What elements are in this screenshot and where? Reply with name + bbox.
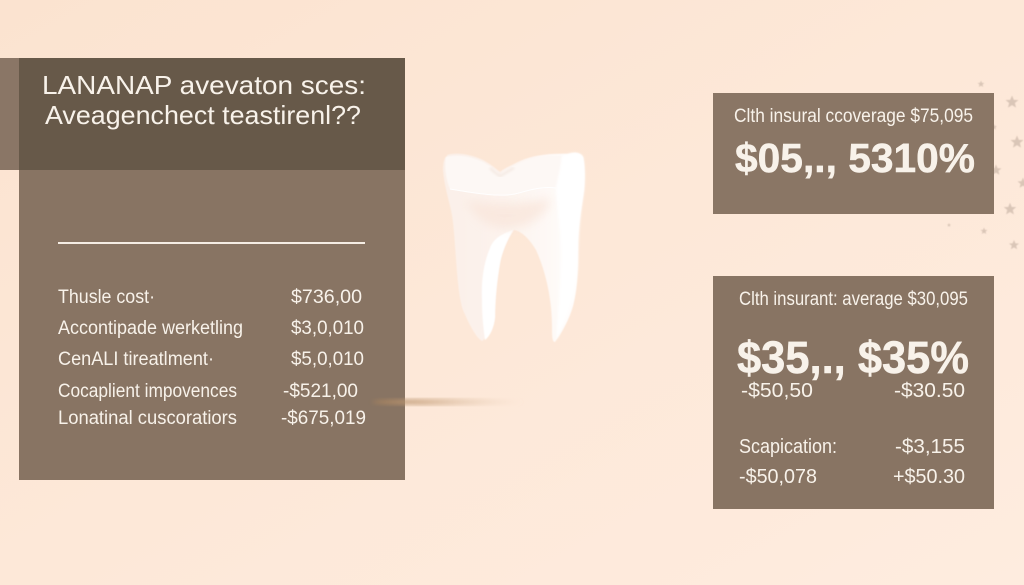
cost rows: Cocaplient impovences	[58, 381, 237, 402]
average figure: $35,., $35%	[737, 332, 969, 383]
cost rows: $5,0,010	[291, 349, 364, 370]
cost rows	[58, 287, 366, 429]
panel body	[713, 276, 994, 509]
root inner highlight	[482, 230, 513, 340]
detail rows: -$50,078	[739, 466, 817, 488]
header band	[0, 58, 19, 170]
detail rows: -$50,50	[741, 380, 813, 402]
tooth shadow	[372, 398, 524, 406]
title	[42, 70, 366, 130]
tooth body	[443, 153, 585, 342]
header band dark	[19, 58, 405, 170]
crown band	[445, 156, 562, 195]
coverage label: Clth insural ccoverage $75,095	[734, 106, 973, 127]
divider rule	[58, 242, 365, 244]
title: Aveagenchect teastirenl??	[45, 100, 361, 130]
panel: insurance average	[713, 276, 994, 509]
cost rows: $736,00	[291, 287, 362, 308]
icon: tooth	[443, 153, 585, 342]
cost rows: Thusle cost·	[58, 287, 155, 308]
cost rows: -$521,00	[283, 381, 358, 402]
detail rows	[739, 380, 965, 488]
detail rows: -$3,155	[895, 436, 965, 458]
cost rows: CenALI tireatlment·	[58, 349, 214, 370]
detail rows: +$50.30	[893, 466, 965, 488]
crown edge	[450, 187, 556, 195]
panel: with insurance coverage	[713, 93, 994, 214]
detail rows: -$30.50	[894, 380, 965, 402]
right side highlight	[556, 153, 584, 340]
average label: Clth insurant: average $30,095	[739, 289, 968, 310]
title: LANANAP avevaton sces:	[42, 70, 366, 100]
cost rows: Accontipade werketling	[58, 318, 243, 339]
cost rows: $3,0,010	[291, 318, 364, 339]
panel body	[19, 58, 405, 480]
coverage figure: $05,., 5310%	[735, 135, 975, 181]
crown fissure	[490, 168, 514, 176]
cost rows: -$675,019	[281, 408, 366, 429]
detail rows: Scapication:	[739, 436, 837, 458]
panel: cost breakdown	[0, 58, 405, 480]
panel body	[713, 93, 994, 214]
decorative stars	[947, 80, 1024, 249]
cost rows: Lonatinal cuscoratiors	[58, 408, 237, 429]
center blush	[465, 198, 550, 228]
